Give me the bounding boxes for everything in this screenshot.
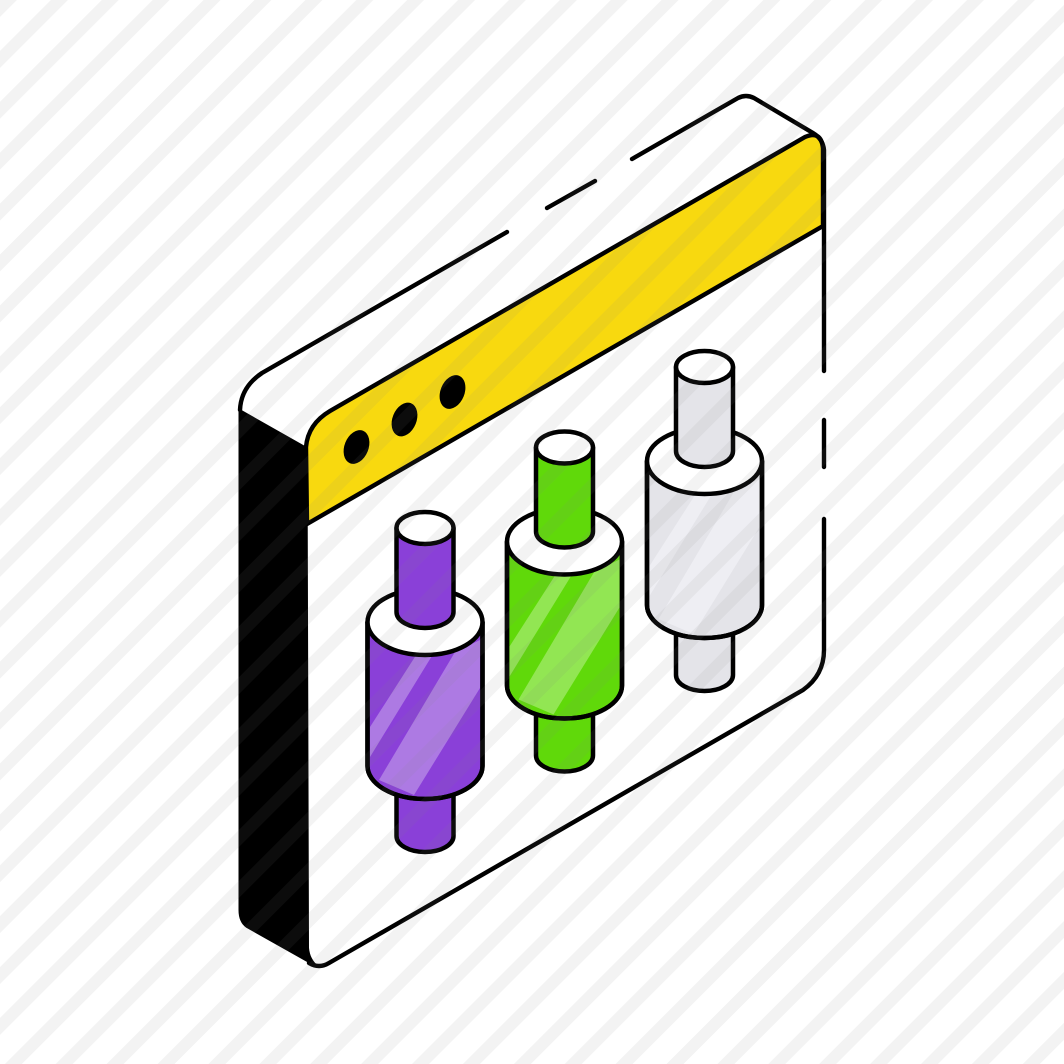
window: isometric frame: [240, 96, 824, 967]
slider: purple: [368, 512, 482, 852]
window side face: black: [240, 410, 318, 967]
title bar dots: [339, 371, 470, 468]
window outline: dashed edges: [240, 96, 824, 966]
slider: grey: [647, 351, 762, 691]
slider: green: [507, 432, 622, 772]
title bar: yellow: [306, 135, 823, 524]
